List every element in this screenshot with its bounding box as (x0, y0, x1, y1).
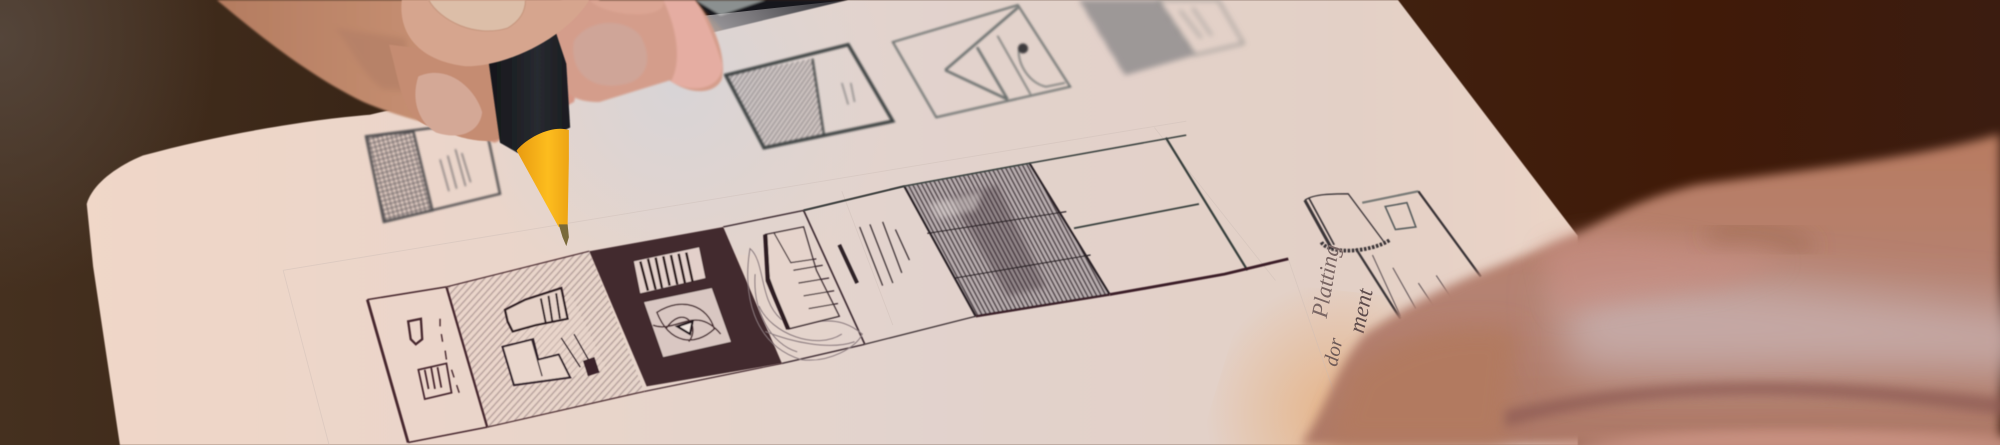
panel 2: hatched page with objects (446, 251, 644, 427)
dark object behind the notebook (695, 0, 852, 34)
right side cup and page sketch (1305, 191, 1481, 319)
right hand: base shape (1301, 134, 2000, 445)
panel 4: book illustration page (723, 210, 865, 363)
left hand: thumb with nail (401, 0, 589, 66)
top thumbnail sketch C (893, 5, 1070, 117)
panel 3: dark scribbled page (589, 227, 782, 386)
top thumbnail sketch D (1079, 0, 1244, 75)
mechanical pencil (489, 33, 570, 246)
left hand: fingers on the right (556, 0, 723, 102)
panel 5: text lines page (804, 186, 976, 344)
left hand: back of the hand (217, 0, 599, 143)
main storyboard strip (367, 135, 1288, 442)
right hand: lower finger (1518, 430, 2000, 445)
handwritten note: ment: ment (1344, 286, 1378, 335)
right hand: upper crease (1709, 231, 1811, 249)
panel 7: blank page with rules (644, 135, 1288, 391)
panel 6: dense hatched page (904, 163, 1110, 316)
right hand: pale highlight (1556, 276, 2000, 376)
handwritten note: Platting: Platting (1307, 243, 1344, 321)
pencil: yellow tip (517, 129, 569, 227)
handwritten note: dor: dor (1320, 336, 1348, 368)
top thumbnail sketch A (366, 121, 500, 222)
pencil: black grip (489, 33, 570, 153)
right hand: pink knuckle (1543, 235, 1786, 312)
right hand: wrinkle shadow (1505, 382, 2000, 427)
panel 1: simple page (367, 287, 487, 442)
notebook page (87, 0, 1578, 445)
left hand: index finger under the pencil (389, 45, 500, 141)
right hand: blurred foreground (1301, 134, 2000, 445)
right hand: lower left warm (1327, 327, 1518, 445)
top thumbnail sketch B (726, 45, 893, 148)
pencil: lead (559, 224, 569, 246)
